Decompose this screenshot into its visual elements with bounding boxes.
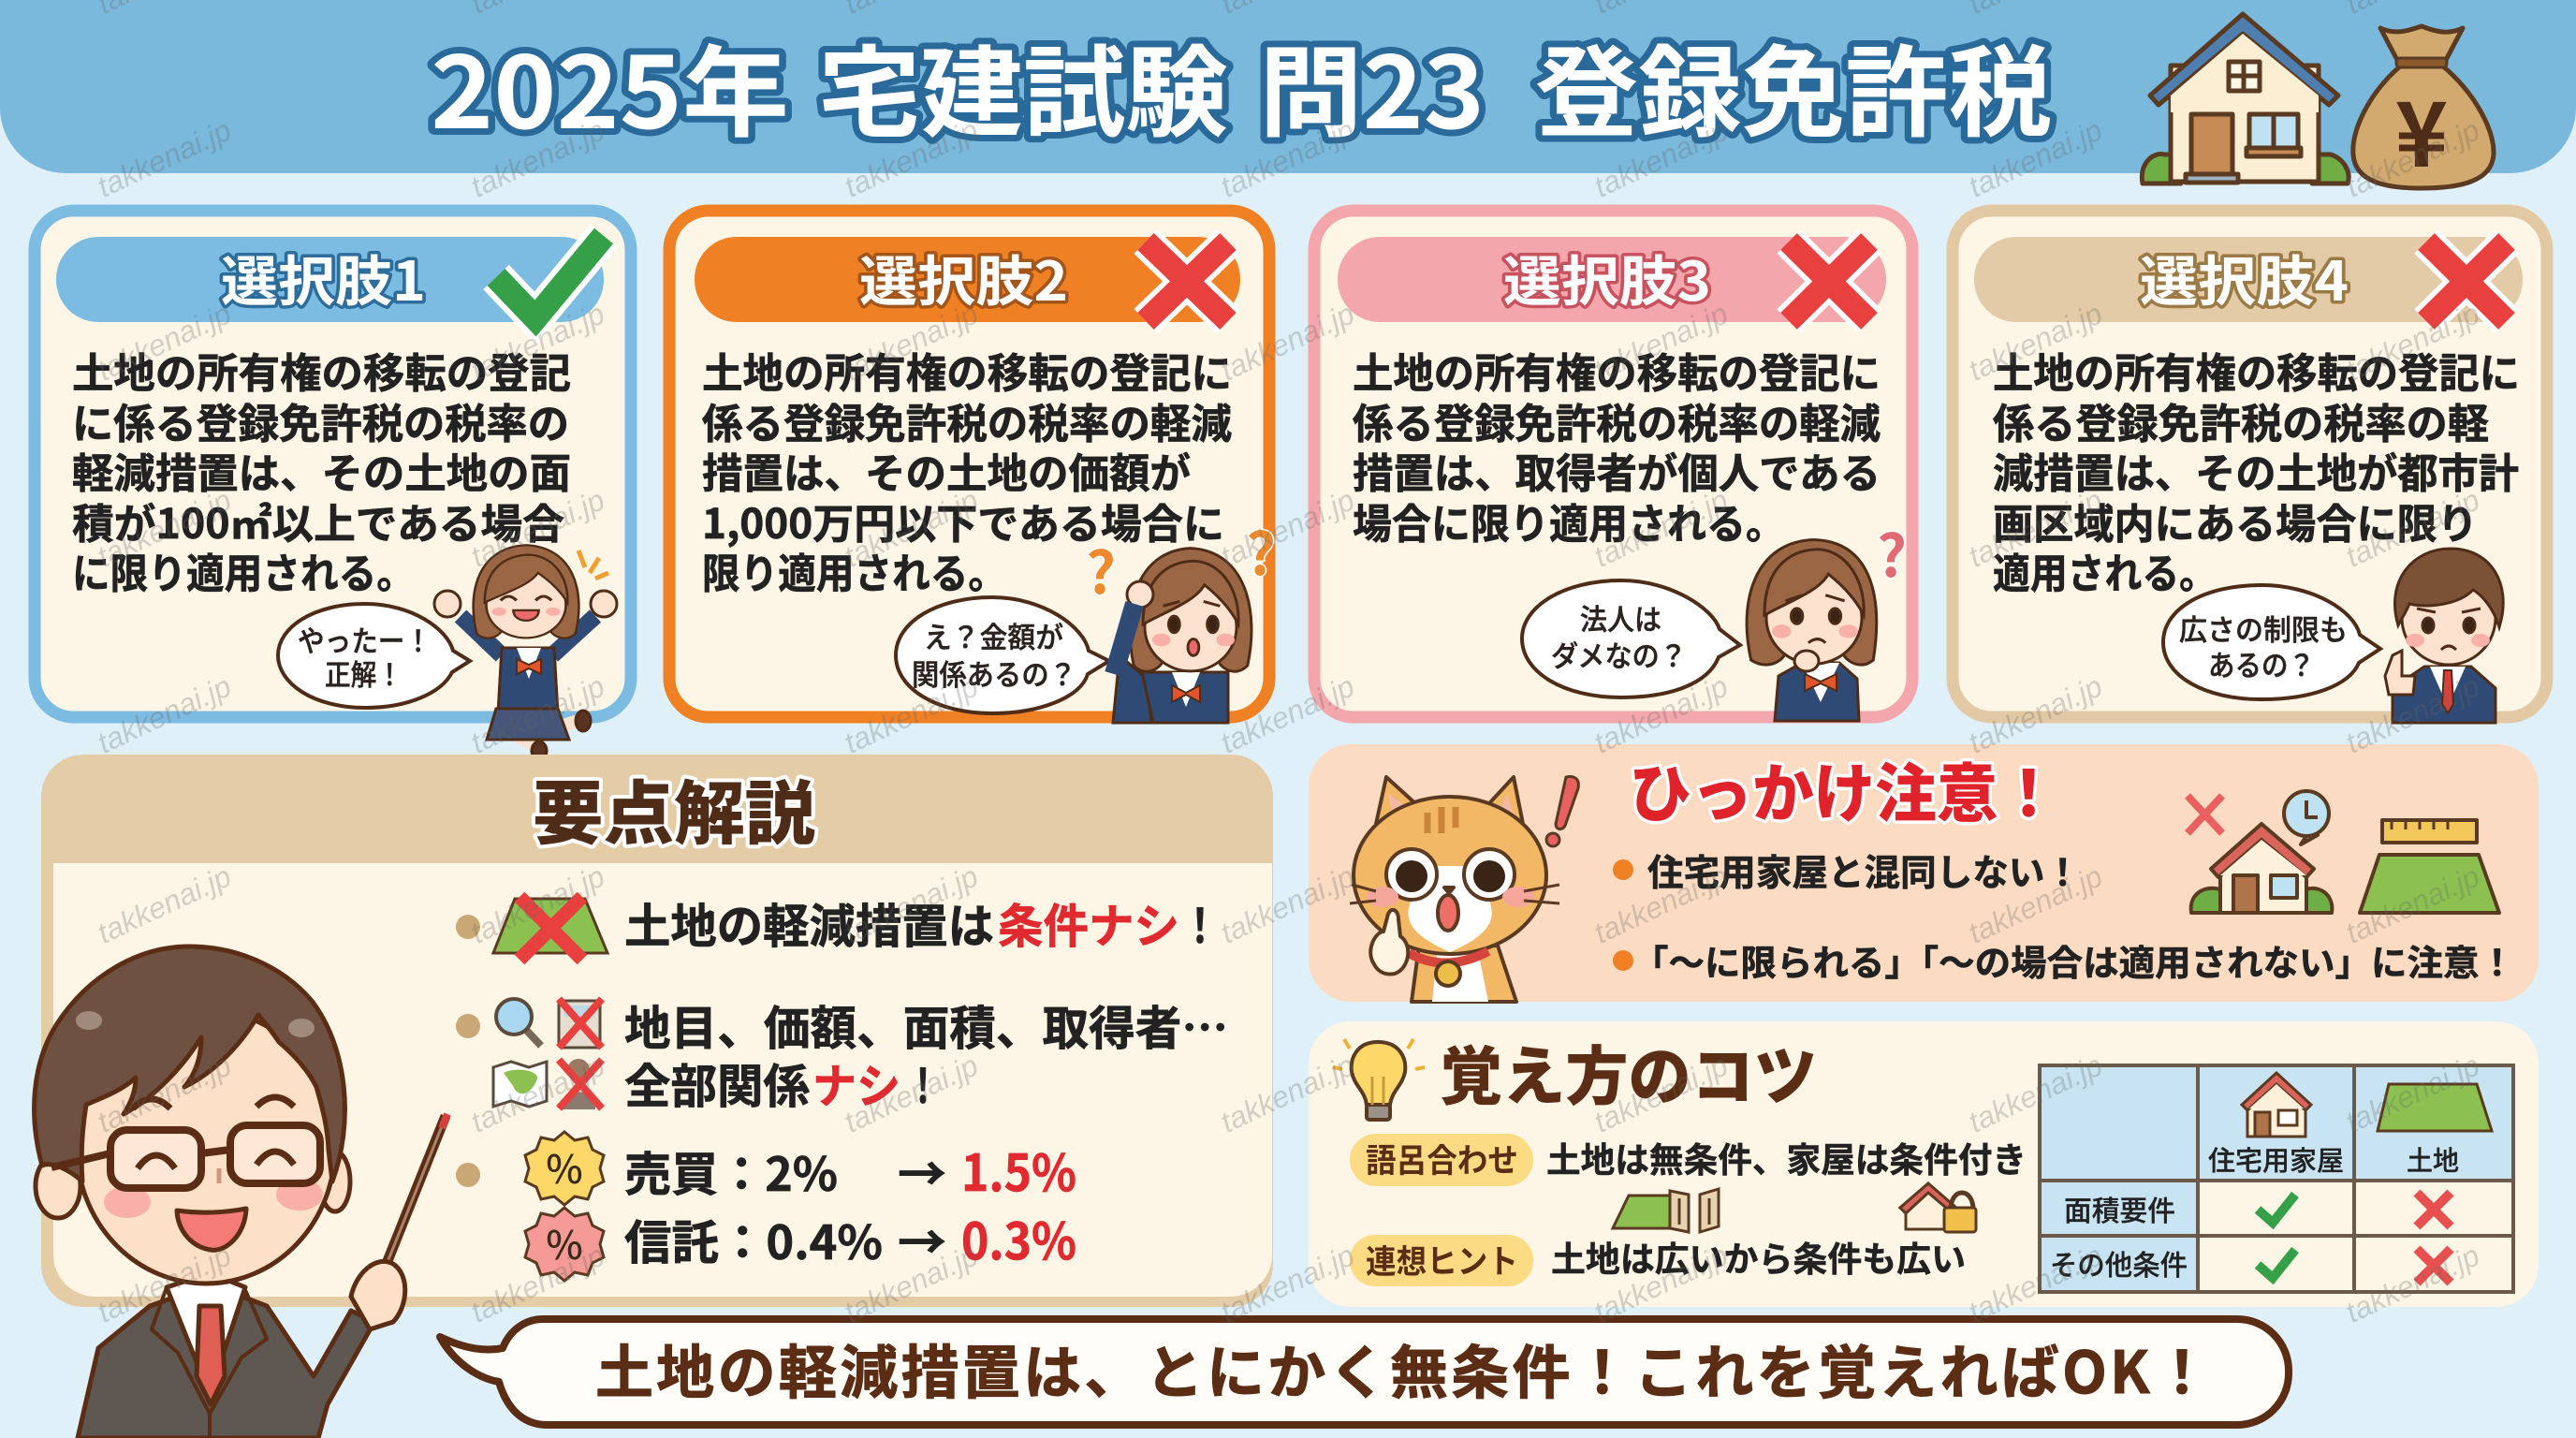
icon: money bag [2353,26,2494,193]
watermark pattern: takkenai.jp [1963,668,2107,760]
panel: option 4 [1953,211,2547,723]
rate row: trust [624,1200,1076,1274]
watermark pattern: takkenai.jp [1215,858,1359,950]
option 4 text: 画区域内にある場合に限り [1993,491,2478,550]
speech bubble: corporation: ダメなの？ [1551,633,1687,675]
key points heading: 要点解説 [533,758,815,858]
watermark pattern: takkenai.jp [1963,482,2107,574]
option 3 heading pill [1338,237,1886,322]
key point: no conditions [624,889,1219,957]
watermark pattern: takkenai.jp [2340,1048,2484,1139]
watermark pattern: takkenai.jp [2340,482,2484,574]
watermark pattern: takkenai.jp [92,296,236,388]
option 1 text: に限り適用される。 [72,540,415,600]
watermark pattern: takkenai.jp [1215,668,1359,760]
tips heading: 覚え方のコツ [1440,1025,1817,1118]
watermark pattern: takkenai.jp [1215,112,1359,204]
tip 1: 土地は無条件、家屋は条件付き [1546,1132,2027,1182]
watermark pattern: takkenai.jp [1215,482,1359,574]
watermark pattern: takkenai.jp [839,296,983,388]
option 3 text: 係る登録免許税の税率の軽減 [1353,390,1881,450]
watermark pattern: takkenai.jp [465,1048,609,1139]
watermark pattern: takkenai.jp [1963,1238,2107,1329]
watermark pattern: takkenai.jp [465,858,609,950]
watermark pattern: takkenai.jp [465,1238,609,1329]
option 2 text: 1,000万円以下である場合に [702,491,1224,550]
character: thinking girl [1747,509,1907,721]
watermark pattern: takkenai.jp [1963,296,2107,388]
watermark pattern: takkenai.jp [1588,112,1733,204]
watermark pattern: takkenai.jp [1963,112,2107,204]
panel: option 2 [669,211,1276,723]
watermark pattern: takkenai.jp [1588,1048,1733,1139]
rate row: trust: 0.3% [961,1200,1076,1274]
icon: percent badge yellow: % [546,1138,583,1196]
option 2 text: 限り適用される。 [702,540,1006,600]
tip 2 [1350,1231,1966,1286]
watermark pattern: takkenai.jp [465,482,609,574]
watermark pattern: takkenai.jp [1588,482,1733,574]
watermark pattern: takkenai.jp [839,112,983,204]
option 2 text: 係る登録免許税の税率の軽減 [702,390,1232,450]
watermark pattern: takkenai.jp [1215,1238,1359,1329]
watermark pattern: takkenai.jp [2340,296,2484,388]
table headers [2050,1139,2459,1284]
watermark pattern: takkenai.jp [465,668,609,760]
rate row: sale: 1.5% [961,1132,1076,1206]
watermark pattern: takkenai.jp [839,1048,983,1139]
option 3 text: 土地の所有権の移転の登記に [1353,340,1881,400]
option 4 text [1993,340,2520,600]
teacher pointer [386,1114,447,1266]
panel: memory tips [1309,1021,2539,1307]
watermark pattern: takkenai.jp [1588,858,1733,950]
character: cheering girl [434,545,617,760]
speech bubble: price: え？金額が [924,614,1063,656]
icon: red cross [1789,242,1869,321]
teacher hand [351,1261,405,1329]
option 3 text: 場合に限り適用される。 [1353,491,1785,550]
comparison table [2040,1065,2513,1292]
watermark pattern: takkenai.jp [465,296,609,388]
icon: calculator crossed [559,999,602,1048]
watermark pattern: takkenai.jp [839,858,983,950]
table icon: land [2378,1084,2492,1131]
key point: nothing matters: ナシ [812,1049,900,1117]
table headers: 土地 [2407,1139,2459,1179]
watermark pattern: takkenai.jp [92,668,236,760]
key point: nothing matters [624,991,1228,1117]
option 2 text [702,340,1232,600]
title: 問23 [1259,13,1485,157]
character: puzzled girl [1086,507,1276,723]
watermark pattern: takkenai.jp [2340,858,2484,950]
table headers: 住宅用家屋 [2208,1139,2344,1179]
table headers: 面積要件 [2064,1188,2175,1229]
watermark pattern: takkenai.jp [2340,668,2484,760]
icon: percent badge red [525,1208,604,1281]
table icon: house [2242,1073,2311,1137]
bottom speech bubble [440,1319,2289,1425]
character: puzzled girl: ? [1086,526,1116,610]
rate row: trust: → [898,1206,946,1273]
speech bubble: corporation [1522,580,1740,697]
watermark pattern: takkenai.jp [839,668,983,760]
option 4 text: 適用される。 [1993,540,2217,600]
teacher head [35,946,350,1284]
character: thinking girl: ? [1877,509,1907,594]
watermark pattern: takkenai.jp [92,482,236,574]
icon: person crossed [559,1059,602,1109]
title [431,13,2052,157]
icon: ruler and land [2360,820,2499,913]
table headers: その他条件 [2050,1242,2188,1284]
trap heading: ひっかけ注意！ [1630,742,2059,835]
watermark pattern: takkenai.jp [92,112,236,204]
watermark pattern: takkenai.jp [92,1048,236,1139]
option 1 text: 積が100㎡以上である場合 [72,491,564,550]
panel: option 3 [1314,211,1912,721]
watermark pattern: takkenai.jp [839,482,983,574]
bottom speech bubble: 土地の軽減措置は、とにかく無条件！これを覚えればOK！ [595,1326,2211,1410]
icon: house [2142,14,2349,183]
icon: land crossed [493,897,607,960]
option 1 text [72,340,571,600]
icon: house with padlock [1900,1183,1976,1232]
table marks [2258,1193,2451,1283]
title: 宅建試験 [818,13,1228,157]
icon: map [493,1062,547,1107]
tip 2: 土地は広いから条件も広い [1551,1231,1966,1282]
option 1 text: 土地の所有権の移転の登記 [72,340,571,400]
option 2 text: 土地の所有権の移転の登記に [702,340,1232,400]
option 3 text [1353,340,1881,550]
icon: money bag: ¥ [2395,63,2448,193]
icon: check mark [496,236,604,318]
watermark pattern: takkenai.jp [2340,1238,2484,1329]
title: 登録免許税 [1535,13,2052,157]
key point: nothing matters: ！ [906,1049,940,1117]
speech bubble: correct: やったー！ [298,618,432,660]
option 4 heading pill [1974,237,2523,322]
character: puzzled girl: ? [1246,507,1276,592]
title: 2025年 [431,13,789,157]
option 4 text: 土地の所有権の移転の登記に [1993,340,2520,400]
watermark pattern: takkenai.jp [1215,296,1359,388]
rate row: sale [624,1132,1076,1206]
icon: house with clock [2188,791,2332,913]
option 4 heading pill: 選択肢4 [2140,238,2349,316]
watermark pattern: takkenai.jp [2340,112,2484,204]
rate row: sale: 売買：2% [624,1137,838,1205]
watermark pattern: takkenai.jp [92,1238,236,1329]
trap bullet 2: 「～に限られる」「～の場合は適用されない」に注意！ [1632,934,2515,986]
watermark pattern: takkenai.jp [1963,1048,2107,1139]
key point: nothing matters: 地目、価額、面積、取得者… [624,991,1228,1059]
icon: red cross [1146,242,1228,321]
icon: percent badge red: % [546,1214,583,1271]
speech bubble: corporation: 法人は [1580,596,1661,638]
speech bubble: correct [278,604,470,708]
icon: land with open gate [1613,1189,1719,1232]
icon: red cross [2426,242,2507,321]
option 4 text: 減措置は、その土地が都市計 [1993,440,2519,500]
key point: no conditions: ！ [1181,889,1219,957]
icon: light bulb [1333,1039,1425,1120]
option 1 text: に係る登録免許税の税率の [72,390,569,450]
option 1 text: 軽減措置は、その土地の面 [72,440,571,500]
key point: no conditions: 土地の軽減措置は [624,889,994,957]
option 2 heading pill [695,237,1240,322]
rate row: trust: 信託：0.4% [624,1206,883,1273]
bullet dots [456,915,480,1187]
character: thinking boy [2385,549,2503,723]
watermark pattern: takkenai.jp [92,858,236,950]
speech bubble: price: 関係あるの？ [912,652,1076,694]
key point: no conditions: 条件ナシ [998,889,1179,957]
option 2 heading pill: 選択肢2 [859,238,1068,316]
watermark pattern: takkenai.jp [465,112,609,204]
watermark pattern: takkenai.jp [1588,1238,1733,1329]
tip 2: 連想ヒント [1366,1236,1518,1284]
watermark pattern: takkenai.jp [1588,296,1733,388]
panel: key points [41,755,1273,1307]
option 4 text: 係る登録免許税の税率の軽 [1993,390,2489,450]
panel: option 1 [35,211,631,760]
panel: trap warning [1309,742,2539,1002]
header band [0,0,2576,173]
icon: percent badge yellow [525,1132,604,1205]
tip 1 [1350,1132,2027,1186]
watermark pattern: takkenai.jp [1963,858,2107,950]
character: teacher with pointer [35,946,447,1438]
option 2 text: 措置は、その土地の価額が [702,440,1191,500]
speech bubble: size: 広さの制限も [2179,607,2348,649]
speech bubble: size [2163,585,2380,699]
tip 1: 語呂合わせ [1366,1135,1518,1182]
icon: magnifier [496,999,541,1046]
trap bullet 1: 住宅用家屋と混同しない！ [1647,844,2081,897]
character: surprised cat [1350,777,1578,1002]
speech bubble: price [896,597,1109,713]
teacher suit [78,1284,374,1438]
watermark pattern: takkenai.jp [1588,668,1733,760]
option 1 heading pill [56,237,604,322]
speech bubble: size: あるの？ [2208,642,2315,684]
rate row: sale: → [898,1137,946,1205]
option 3 text: 措置は、取得者が個人である [1353,440,1881,500]
speech bubble: correct: 正解！ [325,652,402,694]
watermark pattern: takkenai.jp [839,1238,983,1329]
watermark pattern: takkenai.jp [1215,1048,1359,1139]
option 3 heading pill: 選択肢3 [1503,238,1711,316]
option 1 heading pill: 選択肢1 [221,238,426,316]
key point: nothing matters: 全部関係 [624,1049,810,1117]
